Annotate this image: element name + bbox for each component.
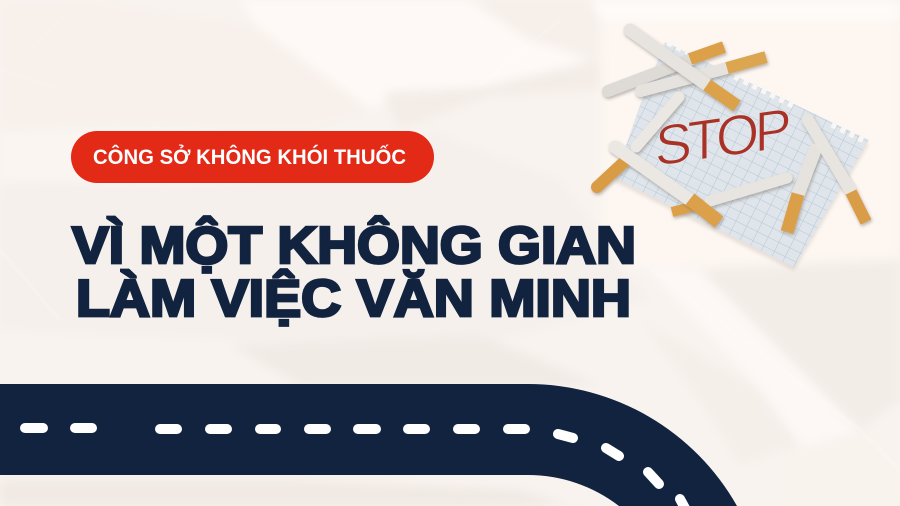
cigarettes front [597,30,866,232]
photo: stop note with cigarettes [597,30,869,271]
stop handwriting: STOP [655,96,792,178]
title [72,216,636,328]
tag text: CÔNG SỞ KHÔNG KHÓI THUỐC [93,145,406,169]
note paper shadow [615,44,869,271]
tag pill [71,131,434,183]
road surface [0,384,737,506]
note perforations [668,42,868,142]
title: LÀM VIỆC VĂN MINH [76,269,631,328]
title: VÌ MỘT KHÔNG GIAN [72,216,636,275]
cigarettes behind [608,47,766,212]
road centre dashes [25,428,686,506]
note paper [615,42,869,267]
road [0,384,737,506]
